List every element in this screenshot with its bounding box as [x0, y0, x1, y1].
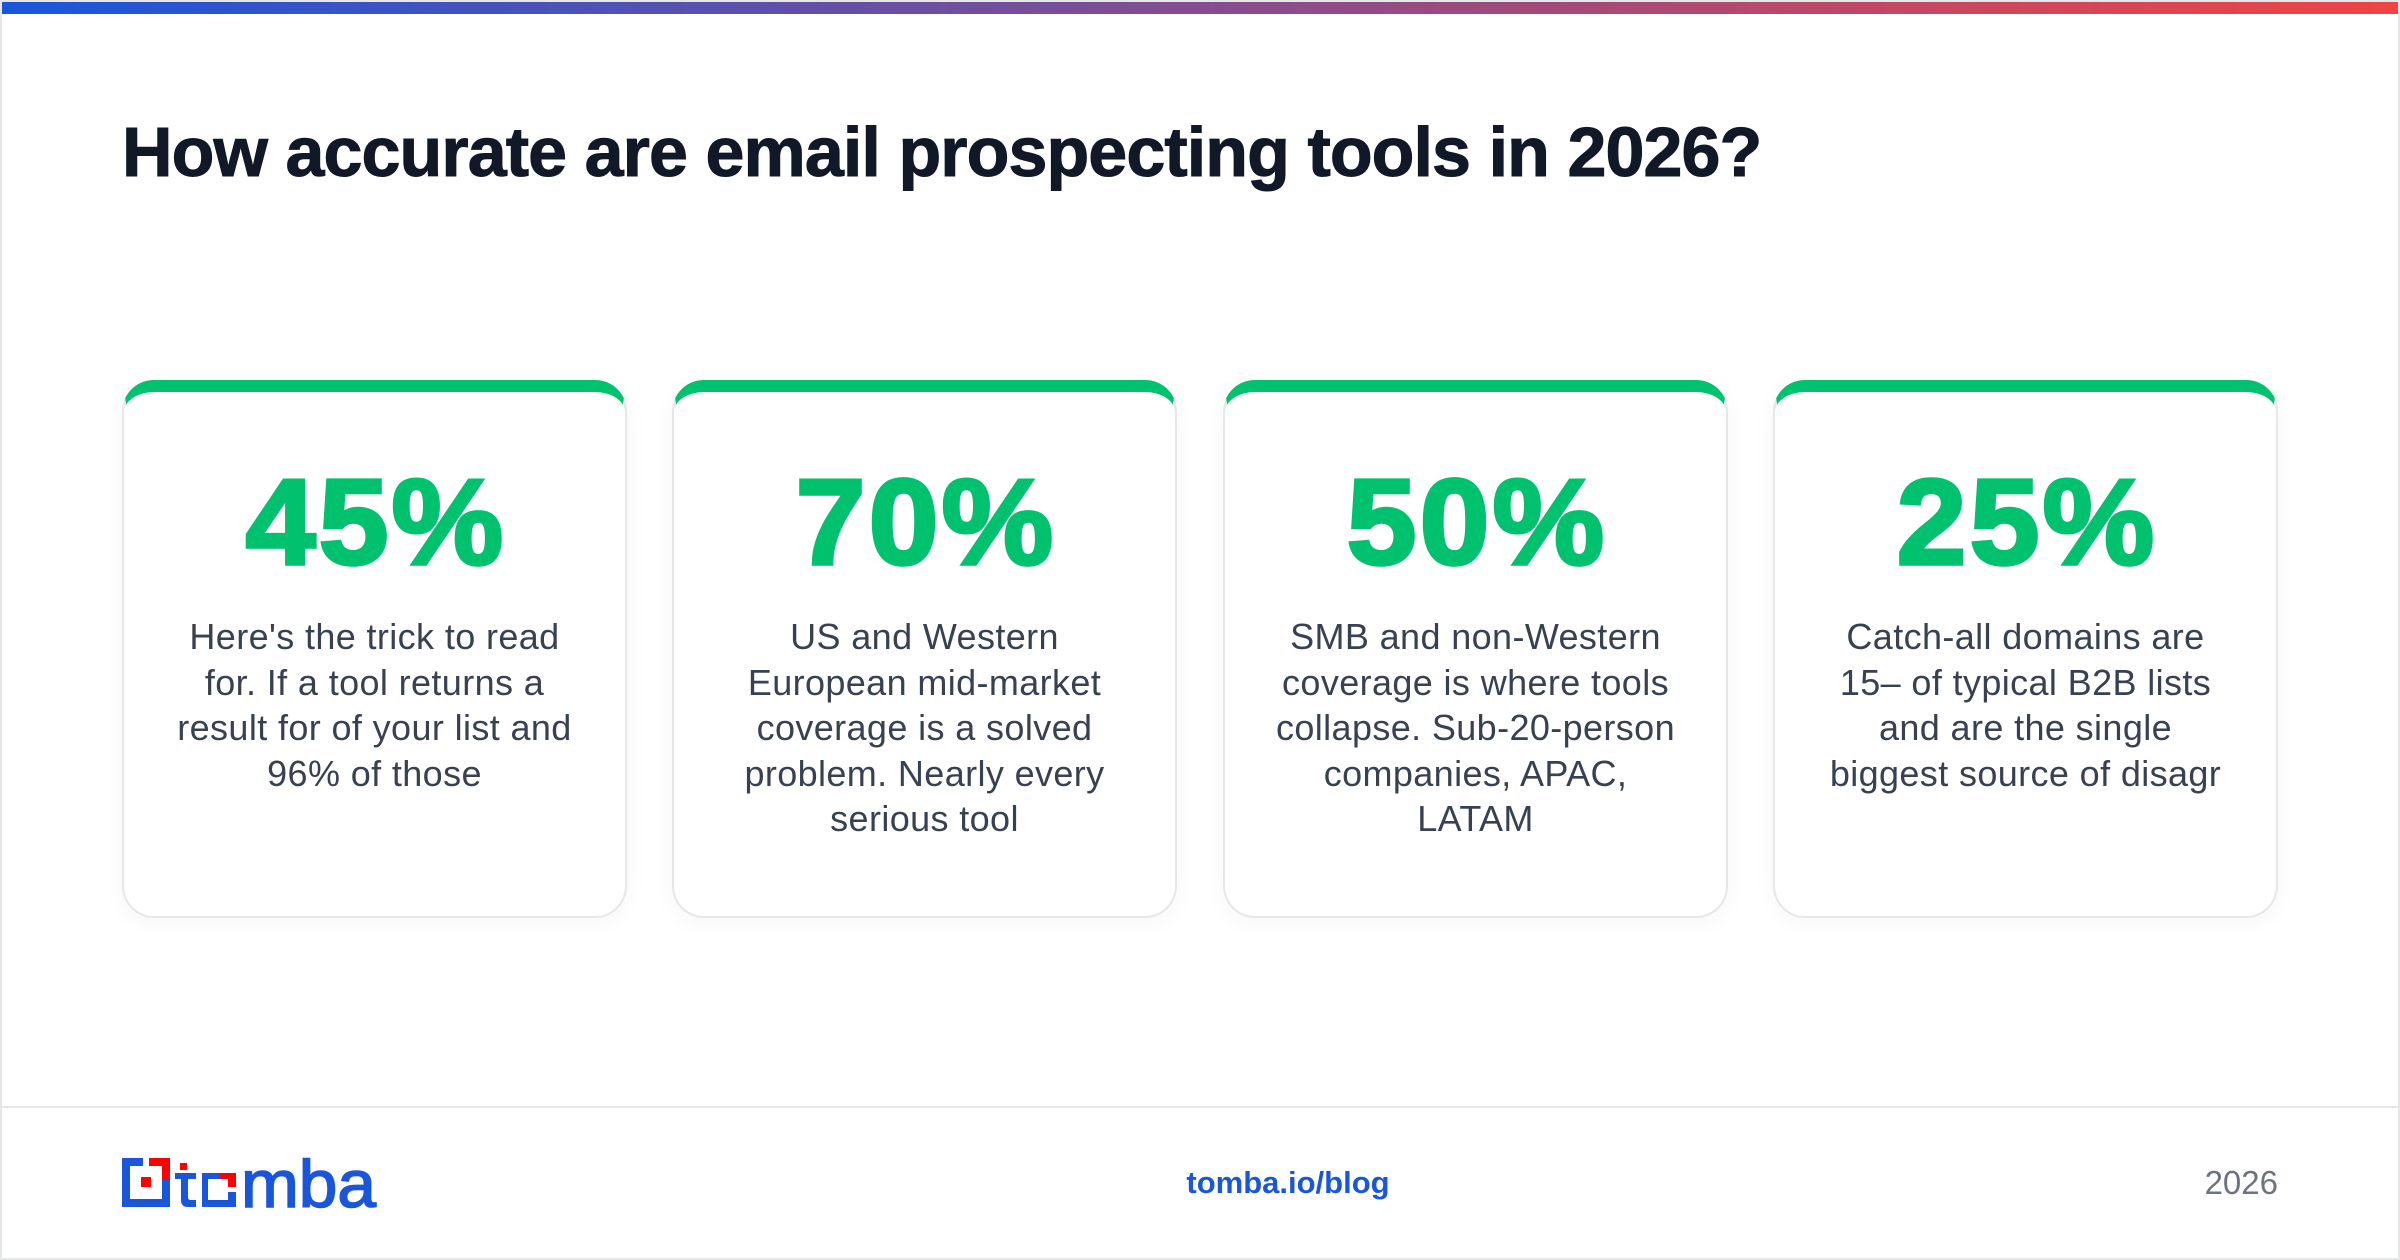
logo letter t: [175, 1173, 196, 1207]
logo letter o blocks: [202, 1173, 236, 1207]
title: How accurate are email prospecting tools in 2026?: [122, 113, 1761, 191]
description: 70%: coverage is a solved: [757, 707, 1092, 748]
panel: 50% stat card: [1223, 380, 1728, 918]
description: 45%: [177, 616, 572, 794]
description: 70%: US and Western: [790, 616, 1059, 657]
panel: 45% stat card: [122, 380, 627, 918]
description: 50%: SMB and non-Western: [1290, 616, 1661, 657]
footer link: tomba.io/blog: [1186, 1165, 1390, 1200]
description: 50%: coverage is where tools: [1282, 662, 1669, 703]
logo: tomba: [122, 1154, 377, 1212]
description: 25%: 15– of typical B2B lists: [1840, 662, 2211, 703]
description: 25%: biggest source of disagr: [1830, 753, 2221, 794]
description: 50%: [1276, 616, 1675, 839]
icon: blue square bracket: [122, 1158, 170, 1207]
stat: 25%: 25%: [1897, 454, 2157, 590]
footer year: 2026: [2205, 1164, 2278, 1201]
footer divider: [2, 1106, 2398, 1108]
description: 45%: Here's the trick to read: [189, 616, 560, 657]
description: 70%: European mid-market: [748, 662, 1101, 703]
description: 50%: companies, APAC,: [1324, 753, 1627, 794]
icon: red t dot: [180, 1163, 187, 1170]
description: 25%: [1830, 616, 2221, 794]
stat: 50%: 50%: [1347, 454, 1607, 590]
description: 50%: collapse. Sub-20-person: [1276, 707, 1675, 748]
description: 70%: problem. Nearly every: [744, 753, 1105, 794]
stat: 45%: 45%: [246, 454, 506, 590]
panel: 70% stat card: [672, 380, 1177, 918]
description: 25%: Catch-all domains are: [1846, 616, 2205, 657]
description: 70%: [744, 616, 1105, 839]
description: 45%: 96% of those: [267, 753, 482, 794]
stat: 70%: 70%: [796, 454, 1056, 590]
description: 45%: result for of your list and: [177, 707, 572, 748]
description: 45%: for. If a tool returns a: [205, 662, 544, 703]
panel: 25% stat card: [1773, 380, 2278, 918]
description: 70%: serious tool: [830, 798, 1019, 839]
description: 50%: LATAM: [1417, 798, 1534, 839]
top gradient bar: [2, 2, 2398, 14]
icon: red o corner: [220, 1173, 236, 1187]
icon: red corner: [149, 1158, 170, 1180]
description: 25%: and are the single: [1879, 707, 2172, 748]
icon: red centre dot: [141, 1177, 151, 1187]
